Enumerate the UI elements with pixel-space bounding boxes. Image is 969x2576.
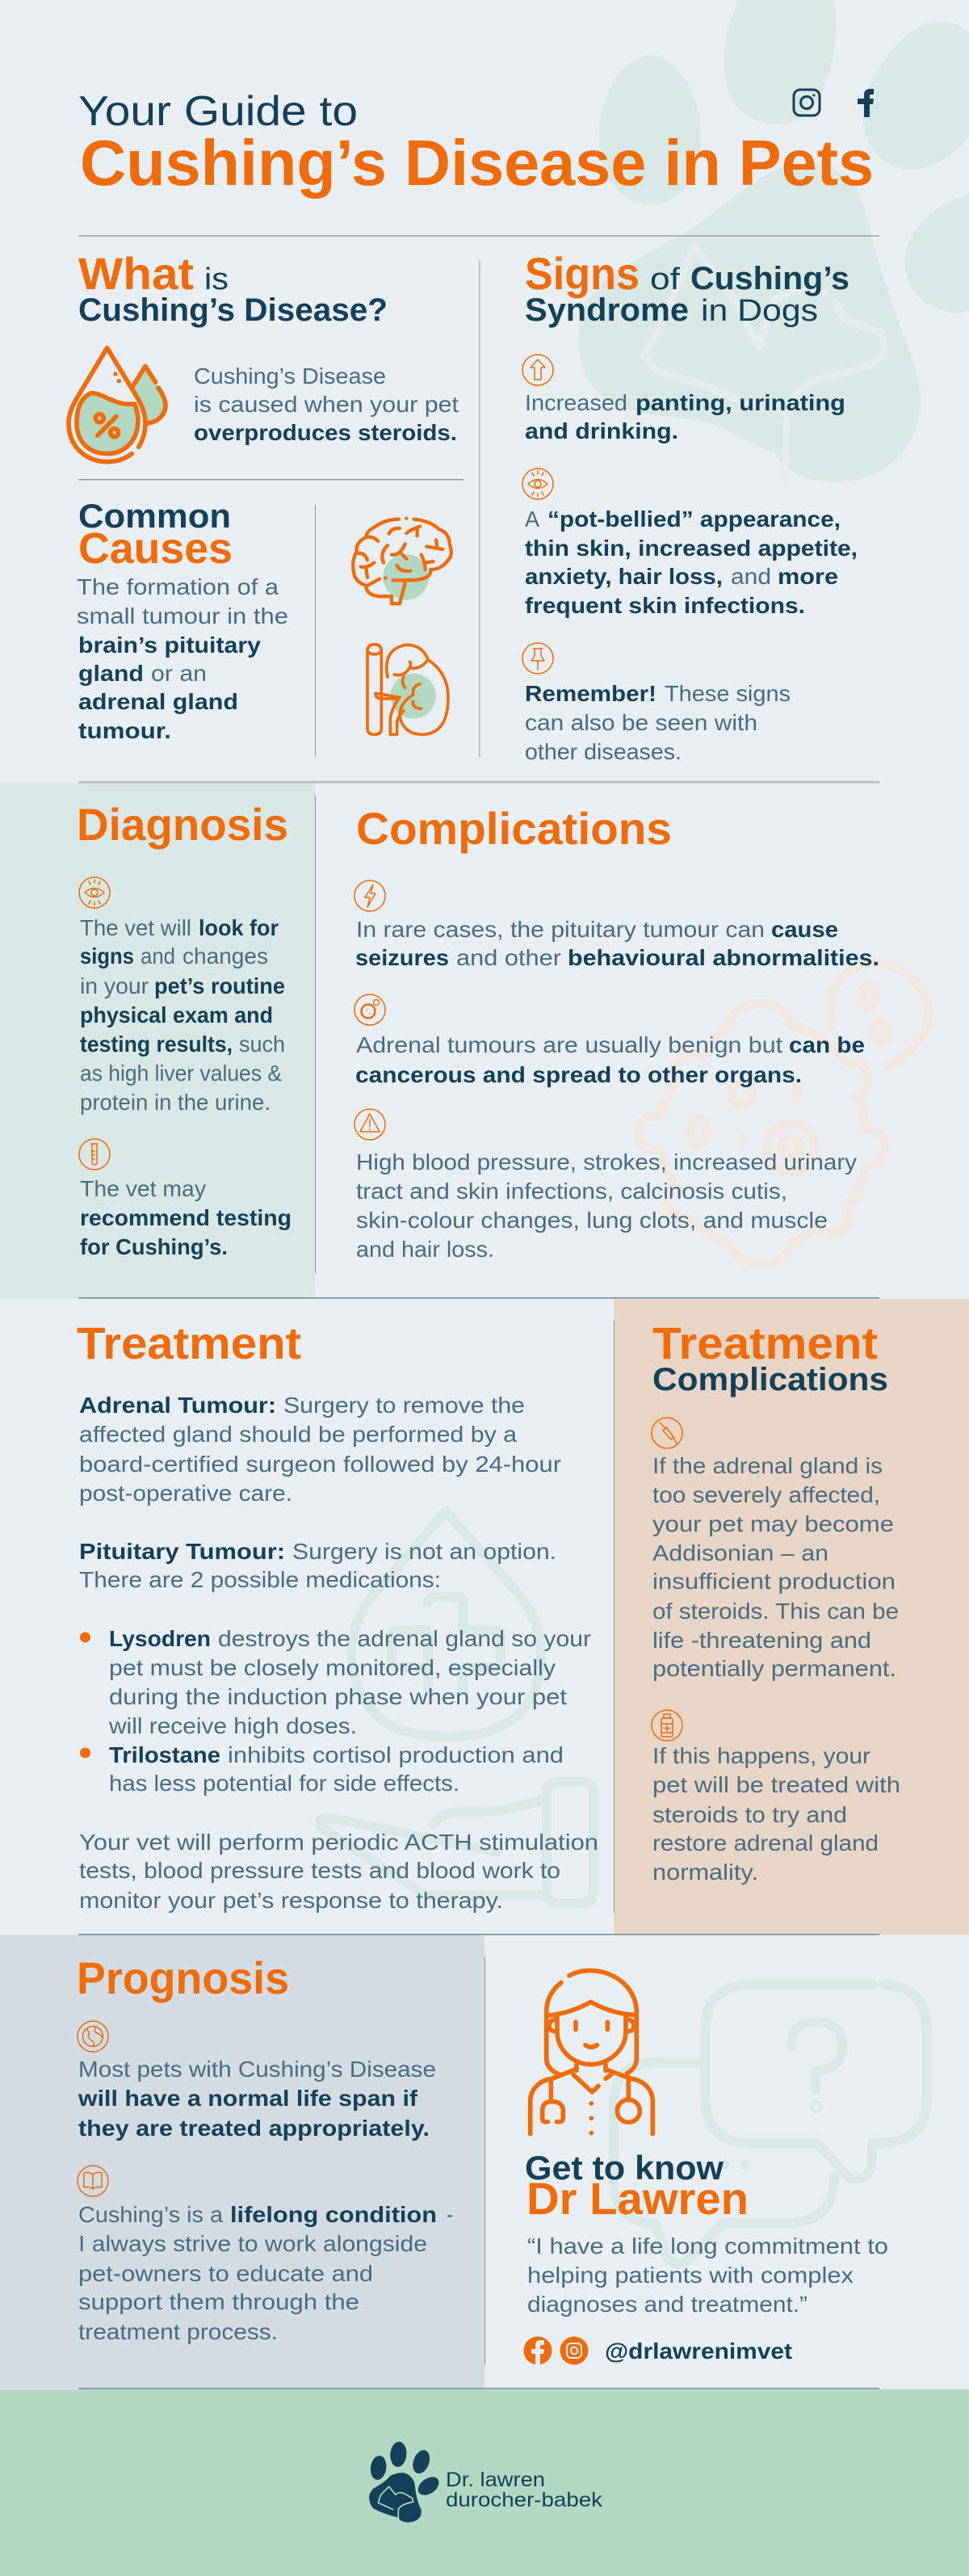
heading: signs: Syndrome [525,292,689,328]
text: adrenal tumour [79,1393,561,1506]
icon: arrow up [522,355,553,385]
text: steroids treatment: steroids to try and [652,1802,847,1827]
text: Addisonian: Addisonian – an [652,1540,828,1565]
text: lifelong condition [78,2202,453,2344]
icon: instagram [794,90,820,116]
heading: prognosis: Prognosis [77,1952,289,2003]
panel: common causes [77,497,451,743]
panel: treatment [77,1317,598,1913]
text: lifelong condition: I always strive to work alongside [78,2231,427,2256]
text: definition: overproduces steroids. [194,420,457,445]
text: look for signs: physical exam and [80,1002,273,1027]
text: pot-bellied: frequent skin infections. [525,593,805,618]
icon: globe [78,2021,108,2052]
heading: treatment complications [652,1317,888,1397]
panel: diagnosis [77,799,292,1259]
text: causes description: The formation of a [77,574,279,599]
list: medications [80,1626,591,1796]
panel: get to know Dr Lawren [523,1970,888,2365]
text: causes description [77,574,288,743]
text: seizures [355,917,879,970]
list: medications: has less potential for side effects. [109,1771,459,1796]
text: pituitary tumour: Surgery is not an option. [292,1539,556,1564]
text: seizures: cause [771,917,838,942]
text: quote [527,2234,888,2317]
background: cell illustration [638,964,929,1263]
footer logo [369,2441,603,2523]
text: look for signs: signs [80,943,134,969]
background: large paw print [578,0,969,483]
text: look for signs: such [239,1032,285,1057]
text: panting: panting, urinating [636,390,845,415]
icon: tumour cell [354,994,385,1025]
text: pot-bellied: A [525,506,539,532]
text: normal life span: Most pets with Cushing’s Disease [78,2057,436,2082]
icon: instagram badge [560,2336,588,2365]
text: recommend testing [80,1176,292,1259]
text: seizures: and other [456,945,561,970]
text: monitoring: Your vet will perform periodic ACTH stimulation [79,1830,598,1855]
text: lifelong condition: treatment process. [78,2319,278,2344]
panel: complications [354,803,879,1262]
heading: signs [525,248,849,328]
icon: pushpin [522,643,553,674]
text: recommend testing: for Cushing’s. [80,1234,228,1259]
icon: syringe [652,1418,682,1448]
text: pot-bellied: “pot-bellied” appearance, [547,506,841,532]
heading: common causes [78,497,233,573]
heading: what is: is [204,263,229,296]
text: adrenal tumours [355,1032,865,1087]
background: speech bubbles [614,1985,927,2263]
text: Addisonian: insufficient production [652,1569,896,1594]
text: adrenal tumour: post-operative care. [79,1481,292,1506]
list: medications: Lysodren [109,1626,211,1651]
text: normal life span: will have a normal life span if [78,2086,418,2111]
icon: warning triangle [354,1109,385,1140]
heading: signs: Cushing’s [690,261,849,296]
text: other complications: and hair loss. [356,1237,494,1262]
list: medications: during the induction phase when your pet [109,1684,567,1709]
list: medications: inhibits cortisol production and [228,1742,564,1767]
text: pot-bellied: more [778,564,838,589]
text: definition: Cushing’s Disease [194,363,386,389]
icon: facebook badge [523,2336,552,2365]
text: panting: Increased [525,390,627,415]
heading: get to know: Dr Lawren [526,2173,749,2224]
text: steroids treatment: If this happens, your [652,1743,870,1768]
text: recommend testing: The vet may [80,1176,206,1201]
icon: open book [78,2166,108,2196]
icon: facebook [858,89,874,117]
icon: test tube [79,1139,110,1170]
text: look for signs: The vet will [80,915,191,940]
text: pot-bellied: thin skin, increased appetite, [525,536,858,561]
heading: complications: Complications [356,803,672,854]
text: remember [525,681,791,764]
text: recommend testing: recommend testing [80,1205,292,1230]
text: panting [525,390,845,443]
text: lifelong condition: support them through the [78,2289,359,2314]
title [78,88,874,199]
heading: common causes: Causes [78,524,233,573]
text: causes description: tumour. [78,718,171,743]
heading: what is: What [78,248,194,299]
text: monitoring [79,1830,598,1913]
text: adrenal tumours: can be [789,1032,865,1057]
text: logo name: Dr. lawren [446,2469,545,2491]
text: causes description: gland [78,661,144,686]
divider lines [78,235,879,2389]
icon: paw logo [369,2441,443,2523]
text: look for signs: pet’s routine [154,973,285,998]
text: panting: and drinking. [525,418,678,443]
text: other complications: tract and skin infections, calcinosis cutis, [356,1179,787,1204]
text: seizures: seizures [355,945,449,970]
background: footer band [0,2389,969,2576]
text: normal life span [78,2057,436,2141]
icon: brain [353,519,451,603]
text: look for signs: changes [182,943,268,969]
icon: doctor [531,1970,652,2134]
list: medications: will receive high doses. [108,1713,357,1738]
panel: prognosis [77,1952,453,2344]
text: remember: can also be seen with [525,710,757,735]
text: adrenal tumour: Adrenal Tumour: [79,1393,276,1418]
text: seizures: behavioural abnormalities. [568,945,879,970]
text: steroids treatment: normality. [652,1860,758,1885]
text: Addisonian: potentially permanent. [652,1656,896,1681]
text: adrenal tumours: Adrenal tumours are usually benign but [356,1032,782,1057]
text: lifelong condition: lifelong condition [230,2202,437,2227]
title: Cushing’s Disease in Pets [80,127,874,199]
text: causes description: small tumour in the [77,603,288,628]
text: Addisonian: too severely affected, [652,1482,880,1507]
heading: treatment: Treatment [77,1317,301,1368]
text: Addisonian: your pet may become [652,1511,894,1536]
heading: get to know [525,2149,749,2224]
text: causes description: adrenal gland [78,689,238,714]
background: treatment complications panel [614,1299,969,1935]
panel: what is Cushing's disease [69,248,459,462]
text: normal life span: they are treated appropriately. [78,2116,430,2141]
text: steroids treatment: restore adrenal gland [652,1830,879,1855]
text: pot-bellied [525,506,858,618]
icon: medicine bottle [652,1710,682,1741]
panel: signs of Cushing's syndrome [522,248,858,764]
text: definition [194,363,459,445]
list: medications: pet must be closely monitored, especially [109,1655,556,1680]
background: diagnosis panel [0,783,315,1299]
heading: what is [78,248,388,328]
text: social handle: @drlawrenimvet [605,2339,792,2364]
text: remember: Remember! [525,681,656,706]
heading: signs: in Dogs [701,294,818,328]
text: pot-bellied: anxiety, hair loss, [525,564,723,589]
heading: signs: of [650,263,681,296]
text: monitoring: monitor your pet’s response to therapy. [79,1888,503,1913]
heading: common causes: Common [78,497,231,535]
icon: kidney [367,645,448,734]
text: Addisonian: of steroids. This can be [652,1599,899,1624]
text: adrenal tumour: board-certified surgeon followed by 24-hour [79,1452,561,1477]
text: look for signs: look for [199,915,279,940]
text: Addisonian [652,1453,899,1681]
text: monitoring: tests, blood pressure tests and blood work to [79,1858,560,1883]
text: causes description: or an [151,661,207,686]
text: quote: diagnoses and treatment.” [527,2292,808,2317]
text: look for signs: and [141,943,175,969]
text: look for signs: as high liver values & [80,1061,282,1086]
text: logo name: durocher-babek [446,2489,603,2511]
text: adrenal tumour: affected gland should be performed by a [79,1422,517,1447]
text: adrenal tumours: cancerous and spread to other organs. [355,1062,802,1087]
text: remember: other diseases. [525,739,682,764]
icon: lightning bolt [354,880,385,911]
heading: signs: Signs [525,248,640,299]
text: lifelong condition: Cushing’s is a [78,2202,223,2227]
title: Your Guide to [78,88,358,135]
text: pituitary tumour [79,1539,556,1592]
text: look for signs [80,915,285,1115]
heading: treatment complications: Complications [652,1362,888,1397]
text: other complications: skin-colour changes, lung clots, and muscle [356,1208,828,1233]
background: medical drop and hand [320,1511,594,1903]
text: other complications: High blood pressure, strokes, increased urinary [356,1149,857,1175]
icon: eye [522,469,553,499]
text: lifelong condition: - [447,2202,453,2227]
text: Addisonian: If the adrenal gland is [652,1453,883,1478]
text: look for signs: testing results, [80,1032,233,1057]
text: seizures: In rare cases, the pituitary tumour can [356,917,765,942]
text: logo name [446,2469,603,2511]
panel: treatment complications [652,1317,900,1885]
text: pituitary tumour: Pituitary Tumour: [79,1539,285,1564]
text: definition: is caused when your pet [194,392,459,417]
heading: what is: Cushing’s Disease? [78,292,388,328]
text: look for signs: protein in the urine. [80,1090,271,1115]
text: look for signs: in your [80,973,149,998]
text: lifelong condition: pet-owners to educate and [78,2261,373,2286]
list: medications: Trilostane [109,1742,220,1767]
text: pot-bellied: and [731,564,771,589]
text: pituitary tumour: There are 2 possible medications: [79,1567,441,1592]
text: remember: These signs [665,681,791,706]
icon: steroid drops [69,348,166,462]
text: other complications [356,1149,857,1262]
text: steroids treatment [652,1743,900,1885]
text: Addisonian: life -threatening and [652,1628,871,1653]
text: causes description: brain’s pituitary [78,632,261,658]
heading: treatment complications: Treatment [652,1317,878,1368]
heading: get to know: Get to know [525,2149,724,2187]
text: quote: “I have a life long commitment to [527,2234,888,2259]
icon: eye [79,877,110,908]
text: quote: helping patients with complex [527,2263,854,2288]
text: adrenal tumour: Surgery to remove the [283,1393,525,1418]
background: prognosis panel [0,1935,484,2389]
heading: diagnosis: Diagnosis [77,799,288,850]
text: steroids treatment: pet will be treated with [652,1772,900,1797]
list: medications: destroys the adrenal gland so your [218,1626,591,1651]
